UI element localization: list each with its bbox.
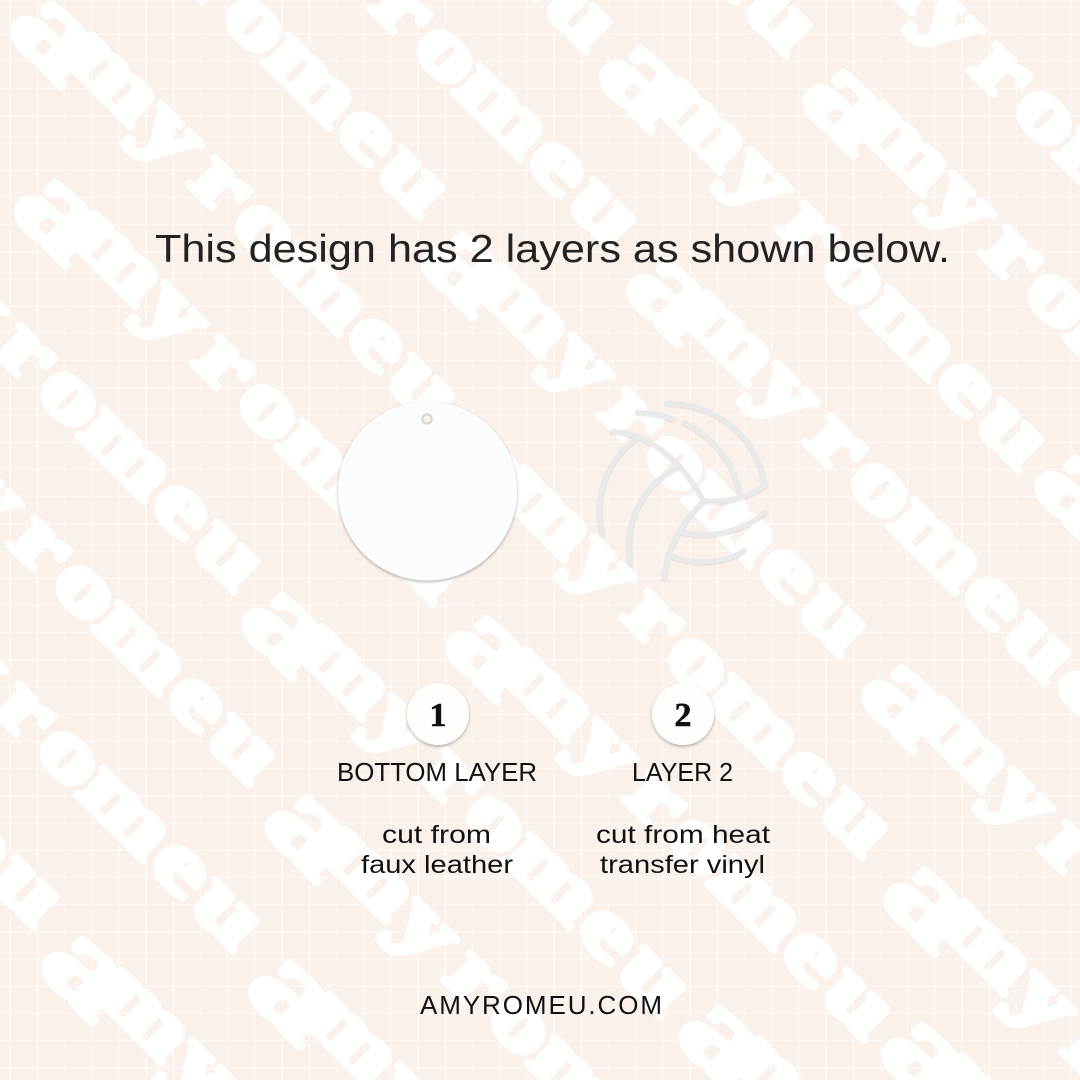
background watermark pattern: a (17, 893, 167, 1044)
description: layer 2 material: transfer vinyl (600, 851, 765, 879)
number badge 2: 2 (674, 697, 692, 734)
background watermark pattern: a (778, 26, 928, 177)
number badge 1 (407, 683, 469, 745)
background watermark pattern: myromeu (53, 186, 487, 620)
number badge 2 (652, 683, 714, 745)
number badge 1: 1 (430, 697, 446, 734)
icon: volleyball vinyl layer (599, 403, 765, 578)
background watermark pattern: myromeu (49, 7, 483, 441)
background watermark pattern: myromeu (484, 622, 918, 1056)
background watermark pattern: a (421, 572, 571, 723)
background watermark pattern: myromeu (460, 238, 894, 672)
background watermark pattern: a (397, 188, 547, 339)
background watermark pattern: a (224, 917, 374, 1068)
background watermark pattern: myromeu (482, 440, 916, 874)
label: bottom layer: BOTTOM LAYER (337, 757, 537, 787)
background watermark pattern: a (241, 752, 391, 903)
description: bottom layer material: cut from (382, 821, 491, 849)
background watermark pattern: a (217, 549, 367, 700)
description: bottom layer material (361, 821, 513, 879)
label: layer 2: LAYER 2 (632, 757, 733, 787)
description: layer 2 material (596, 821, 770, 879)
background watermark pattern: a (419, 390, 569, 541)
website footer: AMYROMEU.COM (420, 990, 662, 1020)
title: This design has 2 layers as shown below. (155, 228, 950, 271)
background watermark pattern: a (859, 824, 1009, 975)
description: bottom layer material: faux leather (361, 851, 513, 879)
background watermark pattern: myromeu (280, 599, 714, 1033)
background watermark pattern: a (837, 621, 987, 772)
background watermark pattern: a (575, 2, 725, 153)
icon: round bottom layer blank with hole (338, 402, 517, 580)
background watermark pattern: myromeu (638, 52, 1072, 486)
description: layer 2 material: cut from heat (596, 821, 770, 849)
background watermark pattern: a (602, 215, 752, 366)
